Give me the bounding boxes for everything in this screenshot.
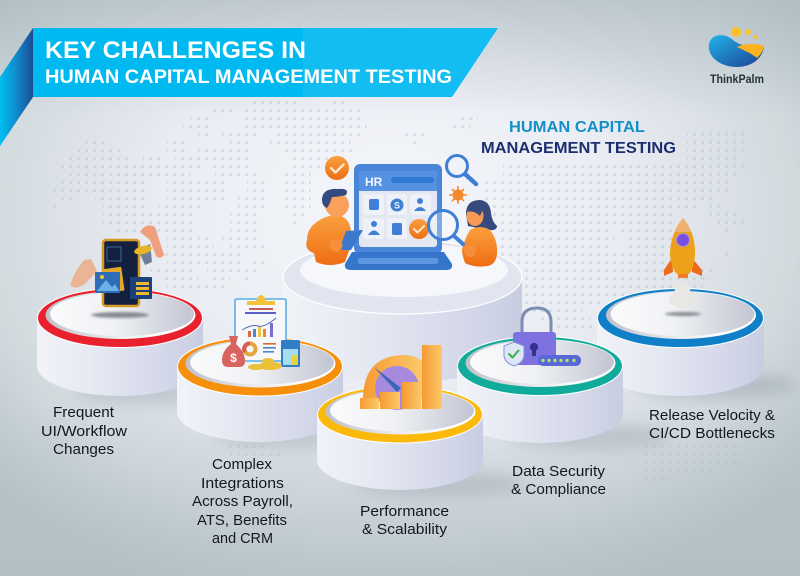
label: data security and compliance: & Compliance	[511, 481, 606, 498]
label: performance and scalability	[360, 503, 449, 538]
icon: rocket	[664, 218, 702, 316]
icon: padlock and shield	[504, 308, 581, 366]
donut	[244, 344, 256, 354]
podium: yellow	[317, 386, 483, 490]
picture card	[101, 267, 125, 293]
banner ribbon	[33, 28, 498, 97]
title banner	[0, 28, 498, 146]
woman with magnifier	[462, 200, 497, 267]
label: release velocity: Release Velocity &	[649, 407, 775, 424]
icon: performance gauge and bars	[360, 345, 442, 410]
label: frequent UI/workflow changes: Changes	[53, 441, 114, 458]
shield	[504, 342, 524, 366]
smoke	[669, 282, 697, 308]
logo mark	[709, 35, 764, 67]
logo wordmark: ThinkPalm	[710, 74, 764, 86]
lock body	[513, 332, 556, 365]
banner fold	[0, 28, 33, 146]
label: frequent UI/workflow changes	[41, 404, 127, 458]
gauge arch	[363, 355, 422, 398]
label: complex integrations: Integrations	[201, 475, 284, 492]
label: complex integrations: ATS, Benefits	[197, 512, 287, 529]
podium shadow: yellow	[355, 471, 525, 497]
laptop: S	[394, 200, 400, 210]
label: performance and scalability: & Scalability	[362, 521, 448, 538]
heading line two: MANAGEMENT TESTING	[481, 140, 676, 157]
label: frequent UI/workflow changes: Frequent	[53, 404, 115, 421]
left hand	[70, 259, 97, 288]
data card	[130, 277, 152, 299]
laptop: HR	[365, 175, 383, 189]
podium: centre	[283, 240, 522, 382]
podium shadow: blue	[635, 371, 795, 399]
laptop	[345, 164, 452, 270]
label: complex integrations	[192, 456, 293, 547]
podium shadow: red	[75, 378, 265, 406]
icon: HR team with laptop	[306, 156, 497, 270]
title line one: KEY CHALLENGES IN	[45, 37, 306, 64]
label: performance and scalability: Performance	[360, 503, 449, 520]
podium: orange	[177, 337, 343, 442]
magnifier small	[446, 156, 476, 184]
icon: payroll and integrations clipboard: $	[230, 351, 237, 365]
label: frequent UI/workflow changes: UI/Workflow	[41, 423, 127, 440]
bug gear	[449, 186, 467, 204]
podium shadow: teal	[510, 424, 670, 450]
fins	[664, 258, 673, 276]
label: release velocity: CI/CD Bottlenecks	[649, 425, 775, 442]
podium: blue	[597, 288, 764, 396]
label: complex integrations: and CRM	[212, 530, 273, 547]
money bag	[222, 336, 245, 367]
calculator	[281, 340, 300, 367]
icon: UI workflow tablet	[70, 225, 164, 318]
label: complex integrations: Across Payroll,	[192, 493, 293, 510]
needle	[374, 367, 401, 392]
podium: teal	[457, 336, 623, 443]
clipboard	[235, 299, 286, 361]
coins	[248, 358, 282, 370]
bar chart	[242, 318, 276, 330]
password bar	[538, 355, 581, 366]
podium: red	[37, 288, 203, 396]
shackle	[522, 308, 551, 333]
label: complex integrations: Complex	[212, 456, 273, 473]
keyhole	[530, 343, 538, 356]
label: data security and compliance	[511, 463, 606, 498]
man with tablet	[306, 189, 363, 265]
label: data security and compliance: Data Security	[512, 463, 606, 480]
logo: ThinkPalm	[709, 27, 764, 86]
contact shadow	[91, 312, 149, 318]
title line two: HUMAN CAPITAL MANAGEMENT TESTING	[45, 67, 452, 88]
label: release velocity	[649, 407, 775, 442]
gauge face	[375, 366, 419, 410]
challenge labels	[41, 404, 775, 547]
contact shadow	[665, 312, 701, 316]
magnifier large	[428, 210, 463, 244]
porthole	[676, 234, 690, 246]
rocket body	[670, 218, 695, 274]
icon: payroll and integrations clipboard	[222, 295, 300, 370]
check badge	[325, 156, 349, 180]
bars	[360, 345, 442, 409]
centre heading	[481, 119, 676, 157]
heading line one: HUMAN CAPITAL	[509, 119, 645, 136]
dotted world map	[53, 101, 744, 480]
right hand and bucket	[140, 225, 164, 258]
tablet	[103, 240, 139, 306]
podium shadow: orange	[215, 423, 385, 449]
